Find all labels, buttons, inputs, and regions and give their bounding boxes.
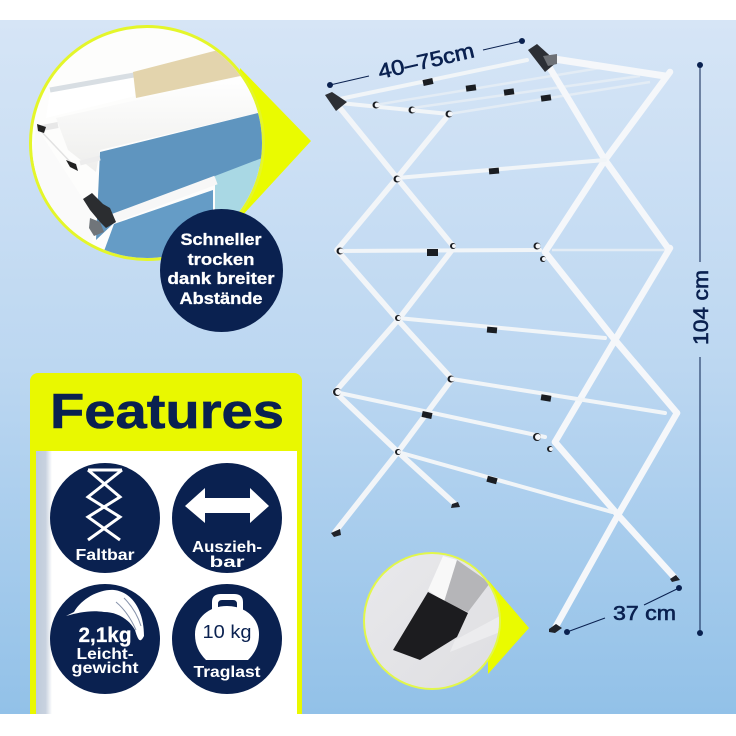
feature: lightweight: 2,1kg: [78, 624, 132, 647]
dimension: depth: [564, 585, 682, 635]
foot circle border: [363, 552, 501, 690]
feature: load capacity: [172, 584, 282, 694]
dimension: height: [690, 62, 713, 636]
icon: kettlebell weight: [195, 594, 259, 660]
foot photo illustration: [365, 554, 499, 688]
feature: foldable: Faltbar: [76, 547, 134, 564]
icon: scissor frame: [88, 470, 122, 540]
inset circle border: [29, 25, 265, 261]
black rail connectors: [333, 78, 553, 484]
right scissor frame: [545, 58, 677, 628]
feature: extendable: Auszieh-: [192, 539, 262, 556]
faint rear rails: [375, 68, 668, 250]
joint crescents: [335, 102, 553, 454]
horizontal rails: [335, 60, 665, 512]
inset pointer triangle: [240, 68, 311, 218]
dimension: height: 104 cm: [690, 270, 713, 345]
heading: Features: [50, 385, 284, 439]
feature: lightweight: Leicht-: [76, 646, 134, 663]
panel frame: [30, 373, 302, 714]
feature: lightweight: gewicht: [72, 660, 138, 677]
callout: faster drying: dank breiter: [168, 269, 275, 288]
foot pointer triangle: [488, 580, 529, 674]
feature: extendable: [172, 463, 282, 573]
callout: faster drying: Abstände: [180, 289, 262, 308]
feature: lightweight: [50, 584, 160, 694]
icon: feather: [66, 590, 144, 640]
feature: extendable: bar: [210, 554, 244, 571]
dimension: width: [327, 38, 525, 88]
inset: towels on rails: [29, 20, 311, 270]
panel body: [36, 451, 297, 714]
callout: faster drying: [160, 209, 283, 332]
feature: load capacity: 10 kg: [202, 622, 252, 642]
left scissor frame: [335, 108, 455, 532]
panel: features: [30, 373, 302, 714]
dimension: depth: 37 cm: [613, 603, 676, 625]
feature: foldable: [50, 463, 160, 573]
rubber feet: [331, 502, 680, 633]
top hinges: [325, 44, 557, 111]
drying rack: [325, 44, 680, 633]
callout: faster drying: Schneller: [180, 230, 262, 249]
feature: load capacity: Traglast: [194, 664, 261, 681]
dimension: width: 40–75cm: [376, 39, 477, 84]
towel photo illustration: [32, 28, 262, 258]
inset: rubber foot: [360, 550, 529, 695]
icon: double arrow: [185, 488, 269, 523]
callout: faster drying: trocken: [188, 250, 254, 269]
